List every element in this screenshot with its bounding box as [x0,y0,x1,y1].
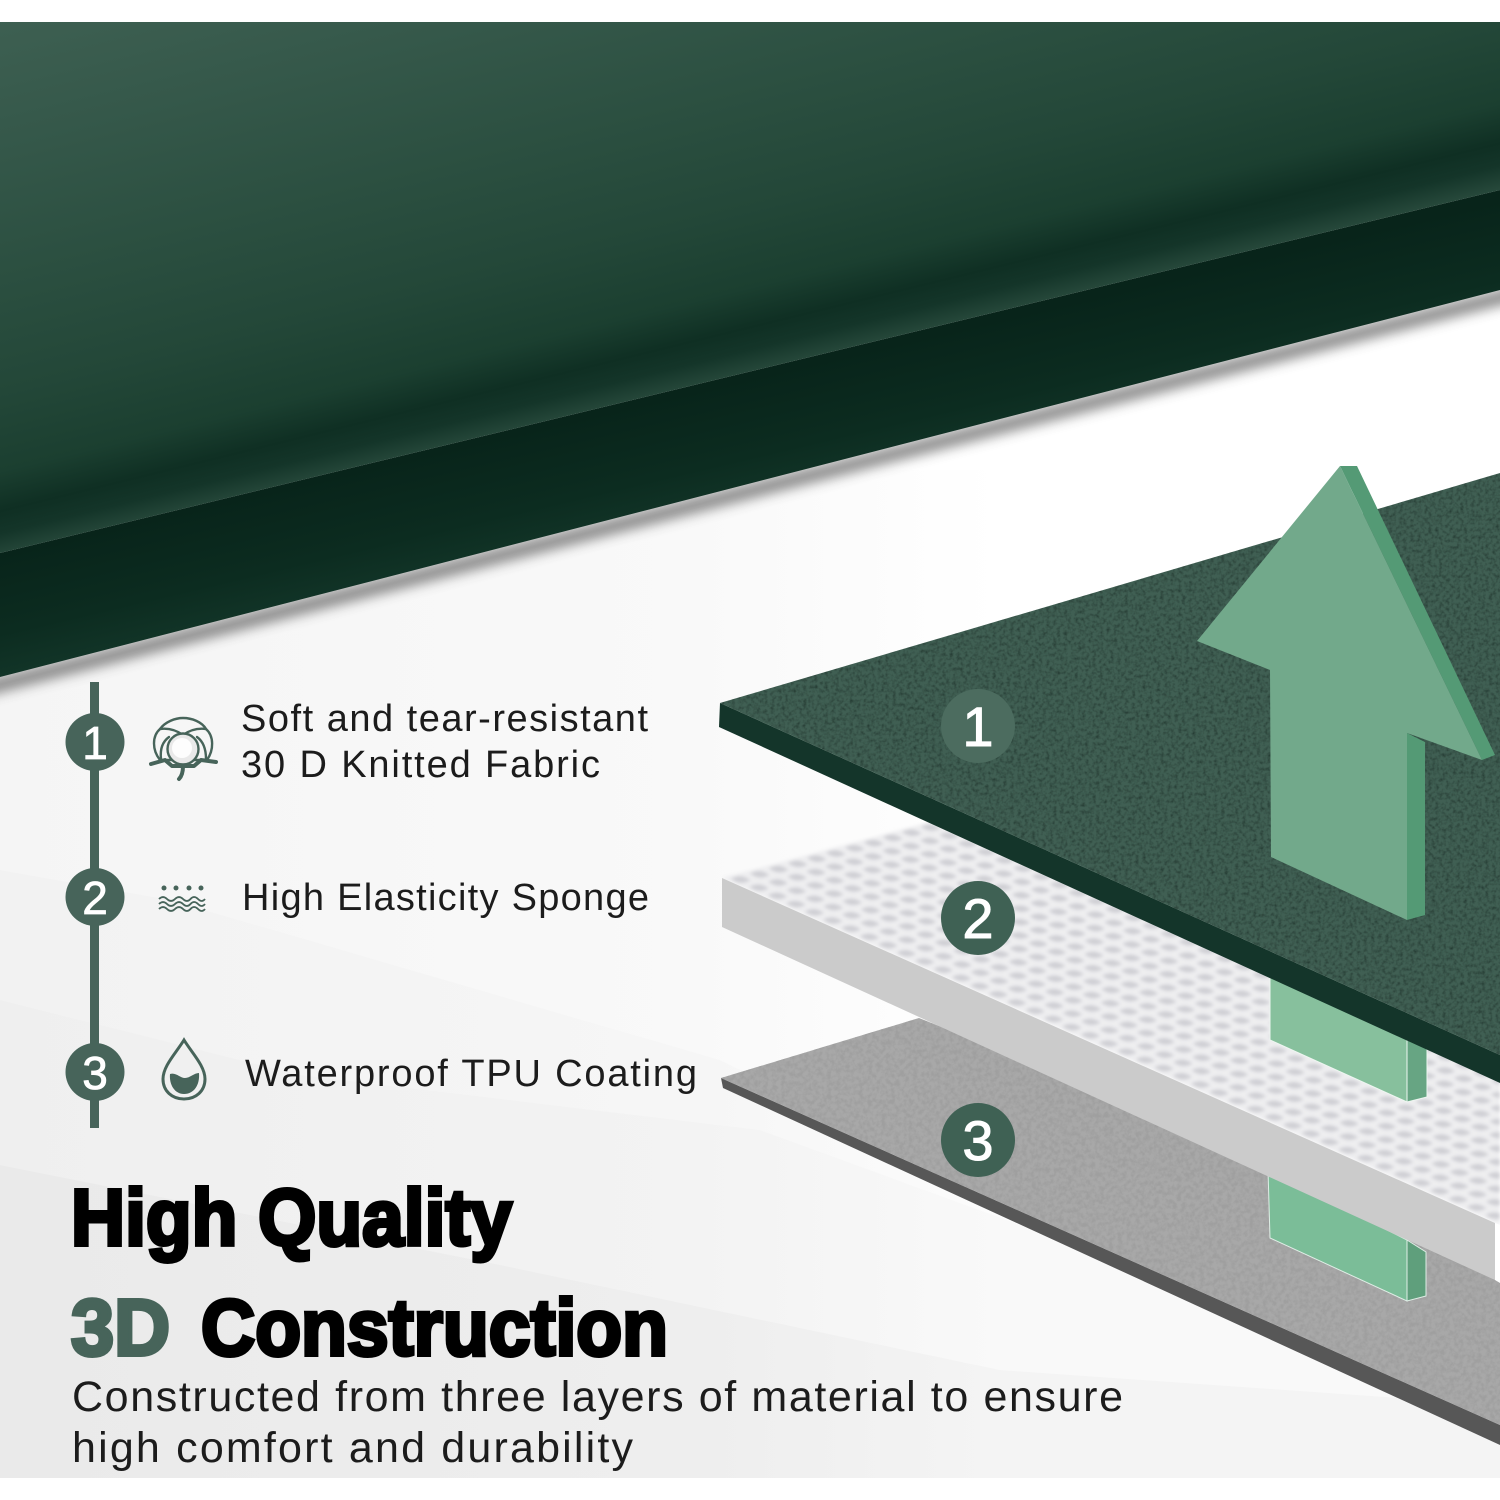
description text [72,1373,1123,1472]
description text: Constructed from three layers of material to ensure [72,1373,1123,1421]
step marker 3 [66,1043,124,1101]
step marker 2: 2 [82,872,108,924]
layer 3: waterproof TPU coating [721,1018,1500,1445]
layer badge 1 [941,689,1015,763]
layer 1: knitted fabric [719,473,1500,1083]
timeline [66,682,124,1128]
fabric close-up band [0,22,1500,708]
icon: waves [159,886,205,911]
layer badge 1: 1 [962,695,994,758]
heading: High Quality [71,1173,512,1262]
step marker 1: 1 [82,717,108,769]
arrow segment over layer 2 [1270,960,1427,1102]
upward arrow [1197,466,1495,920]
layer badge 2 [941,881,1015,955]
step text 2: High Elasticity Sponge [242,877,649,919]
step text 1: Soft and tear-resistant [241,698,648,740]
arrow segment over layer 3 [1268,1170,1426,1301]
step marker 2 [66,868,124,926]
layer 2: high elasticity sponge [722,822,1500,1283]
background: soft grey swooshes [0,470,1500,1478]
layer badge 3 [941,1103,1015,1177]
description text: high comfort and durability [72,1424,634,1472]
heading: 3D [71,1283,170,1372]
layer badge 3: 3 [962,1109,994,1172]
step text 1 [241,698,648,786]
step marker 3: 3 [82,1047,108,1099]
step text 1: 30 D Knitted Fabric [241,744,600,786]
step text 3: Waterproof TPU Coating [245,1053,697,1095]
icon: water drop [163,1040,205,1099]
icon: cotton boll [151,718,216,779]
layer badge 2: 2 [962,887,994,950]
heading [71,1173,668,1372]
step marker 1 [66,713,124,771]
heading: Construction [201,1283,668,1372]
